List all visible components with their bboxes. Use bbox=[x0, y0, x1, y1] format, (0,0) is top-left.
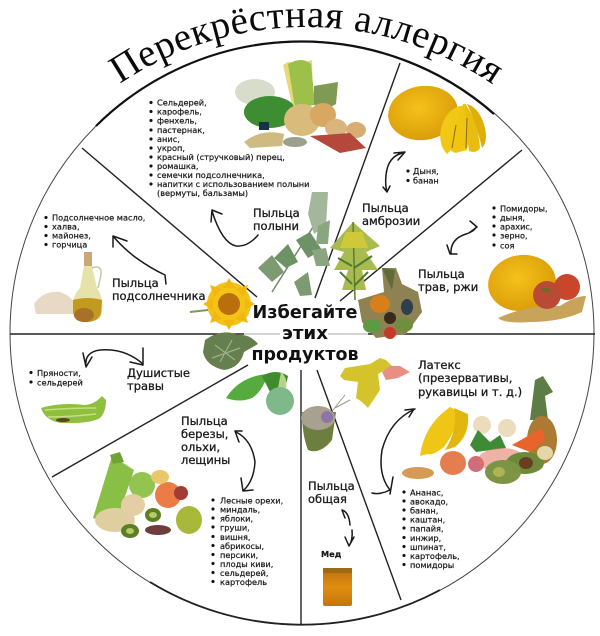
product list: майонез, bbox=[52, 230, 91, 240]
label: honey: Мед bbox=[321, 549, 342, 559]
product list: шпинат, bbox=[410, 542, 446, 552]
label: подсолнечника bbox=[112, 289, 206, 303]
icon: ragweed plant bbox=[330, 222, 380, 300]
icon: wormwood plant bbox=[258, 192, 330, 296]
arrow bbox=[235, 431, 255, 491]
icon: sunflower bbox=[190, 278, 255, 330]
arrow bbox=[211, 210, 258, 246]
label: Пыльца bbox=[362, 201, 409, 215]
product list: груши, bbox=[220, 522, 250, 532]
product list: Подсолнечное масло, bbox=[52, 212, 145, 222]
label: Латекс bbox=[418, 358, 461, 372]
label: Пыльца bbox=[253, 206, 300, 220]
label: лещины bbox=[181, 453, 230, 467]
arrow bbox=[447, 221, 477, 254]
label: (презервативы, bbox=[418, 371, 512, 385]
food image: celery bbox=[41, 396, 106, 423]
product list: вишня, bbox=[220, 532, 251, 542]
product list: анис, bbox=[157, 134, 180, 144]
product list bbox=[44, 212, 145, 250]
product list: Ананас, bbox=[410, 488, 443, 498]
center heading: Избегайте bbox=[252, 303, 358, 323]
icon: honey jar bbox=[323, 568, 352, 606]
product list: банан bbox=[413, 176, 439, 186]
product list: папайя, bbox=[410, 524, 444, 534]
product list: абрикосы, bbox=[220, 541, 264, 551]
icon: dried herbs bbox=[203, 332, 258, 370]
label: полыни bbox=[253, 219, 299, 233]
product list: Сельдерей, bbox=[157, 98, 207, 108]
product list bbox=[30, 368, 83, 388]
product list: банан, bbox=[410, 506, 438, 516]
product list: Лесные орехи, bbox=[220, 496, 283, 506]
product list: Дыня, bbox=[413, 166, 439, 176]
product list bbox=[150, 98, 309, 198]
product list: семечки подсолнечника, bbox=[157, 170, 265, 180]
icon: green leaves bbox=[226, 372, 294, 415]
label: Пыльца bbox=[181, 414, 228, 428]
product list bbox=[212, 496, 283, 587]
product list: карофель, bbox=[157, 106, 202, 116]
product list: помидоры bbox=[410, 560, 454, 570]
product list: пастернак, bbox=[157, 125, 205, 135]
product list: авокадо, bbox=[410, 496, 448, 506]
arrow bbox=[372, 409, 415, 494]
product list: (вермуты, бальзамы) bbox=[157, 188, 248, 198]
product list: халва, bbox=[52, 222, 80, 232]
product list: картофель bbox=[220, 577, 267, 587]
product list bbox=[406, 166, 439, 186]
product list: напитки с использованием полыни bbox=[157, 179, 309, 189]
panel: grass and rust pollen bbox=[358, 204, 586, 339]
label: Пыльца bbox=[418, 267, 465, 281]
product list: горчица bbox=[52, 240, 87, 250]
panel: ragweed pollen bbox=[330, 81, 486, 300]
panel: birch, alder, hazel pollen bbox=[93, 372, 294, 587]
food image: tropical fruits bbox=[402, 376, 557, 484]
product list: фенхель, bbox=[157, 116, 197, 126]
product list: ромашка, bbox=[157, 161, 198, 171]
food image: celery, dill, potatoes, parsnip bbox=[235, 60, 366, 153]
product list: сельдерей, bbox=[220, 568, 268, 578]
product list: соя bbox=[500, 240, 515, 250]
arrow bbox=[342, 510, 354, 546]
panel: latex bbox=[340, 358, 557, 570]
label: травы bbox=[127, 379, 164, 393]
food image: melon and bananas bbox=[385, 81, 486, 154]
label: трав, ржи bbox=[418, 280, 478, 294]
food image: melon, tomatoes, grain bbox=[484, 251, 586, 322]
product list: Помидоры, bbox=[500, 204, 548, 214]
product list: сельдерей bbox=[37, 378, 83, 388]
panel: general pollen bbox=[301, 395, 355, 606]
product list: зерно, bbox=[500, 230, 528, 240]
label: амброзии bbox=[362, 214, 420, 228]
food image: fruit pile bbox=[93, 452, 202, 538]
product list: Пряности, bbox=[37, 368, 81, 378]
icon: dried bouquet bbox=[301, 395, 350, 451]
product list: картофель, bbox=[410, 551, 460, 561]
arrow bbox=[113, 236, 166, 284]
label: Пыльца bbox=[308, 479, 355, 493]
product list bbox=[492, 204, 548, 250]
label: березы, bbox=[181, 427, 228, 441]
product list: арахис, bbox=[500, 222, 533, 232]
panel: sunflower pollen bbox=[34, 212, 255, 330]
product list: персики, bbox=[220, 550, 258, 560]
center heading: этих bbox=[282, 324, 329, 344]
panel: aromatic herbs bbox=[30, 332, 258, 423]
center heading: продуктов bbox=[252, 345, 358, 365]
arrow bbox=[83, 348, 143, 367]
product list: красный (стручковый) перец, bbox=[157, 152, 285, 162]
label: рукавицы и т. д.) bbox=[418, 385, 522, 399]
label: Пыльца bbox=[112, 276, 159, 290]
label: общая bbox=[308, 492, 347, 506]
label: ольхи, bbox=[181, 440, 220, 454]
label: Душистые bbox=[127, 366, 190, 380]
product list: миндаль, bbox=[220, 504, 260, 514]
product list: плоды киви, bbox=[220, 559, 273, 569]
product list: укроп, bbox=[157, 143, 185, 153]
product list: инжир, bbox=[410, 533, 441, 543]
product list: яблоки, bbox=[220, 514, 253, 524]
product list: дыня, bbox=[500, 212, 525, 222]
product list: каштан, bbox=[410, 514, 445, 524]
icon: grass bouquet bbox=[358, 268, 422, 339]
panel: wormwood pollen bbox=[150, 60, 366, 296]
center heading bbox=[252, 303, 358, 365]
product list bbox=[402, 488, 460, 570]
arrow bbox=[383, 152, 405, 192]
icon: rubber gloves bbox=[340, 358, 410, 408]
food image: oil bottle, halva, nuts bbox=[34, 252, 102, 322]
